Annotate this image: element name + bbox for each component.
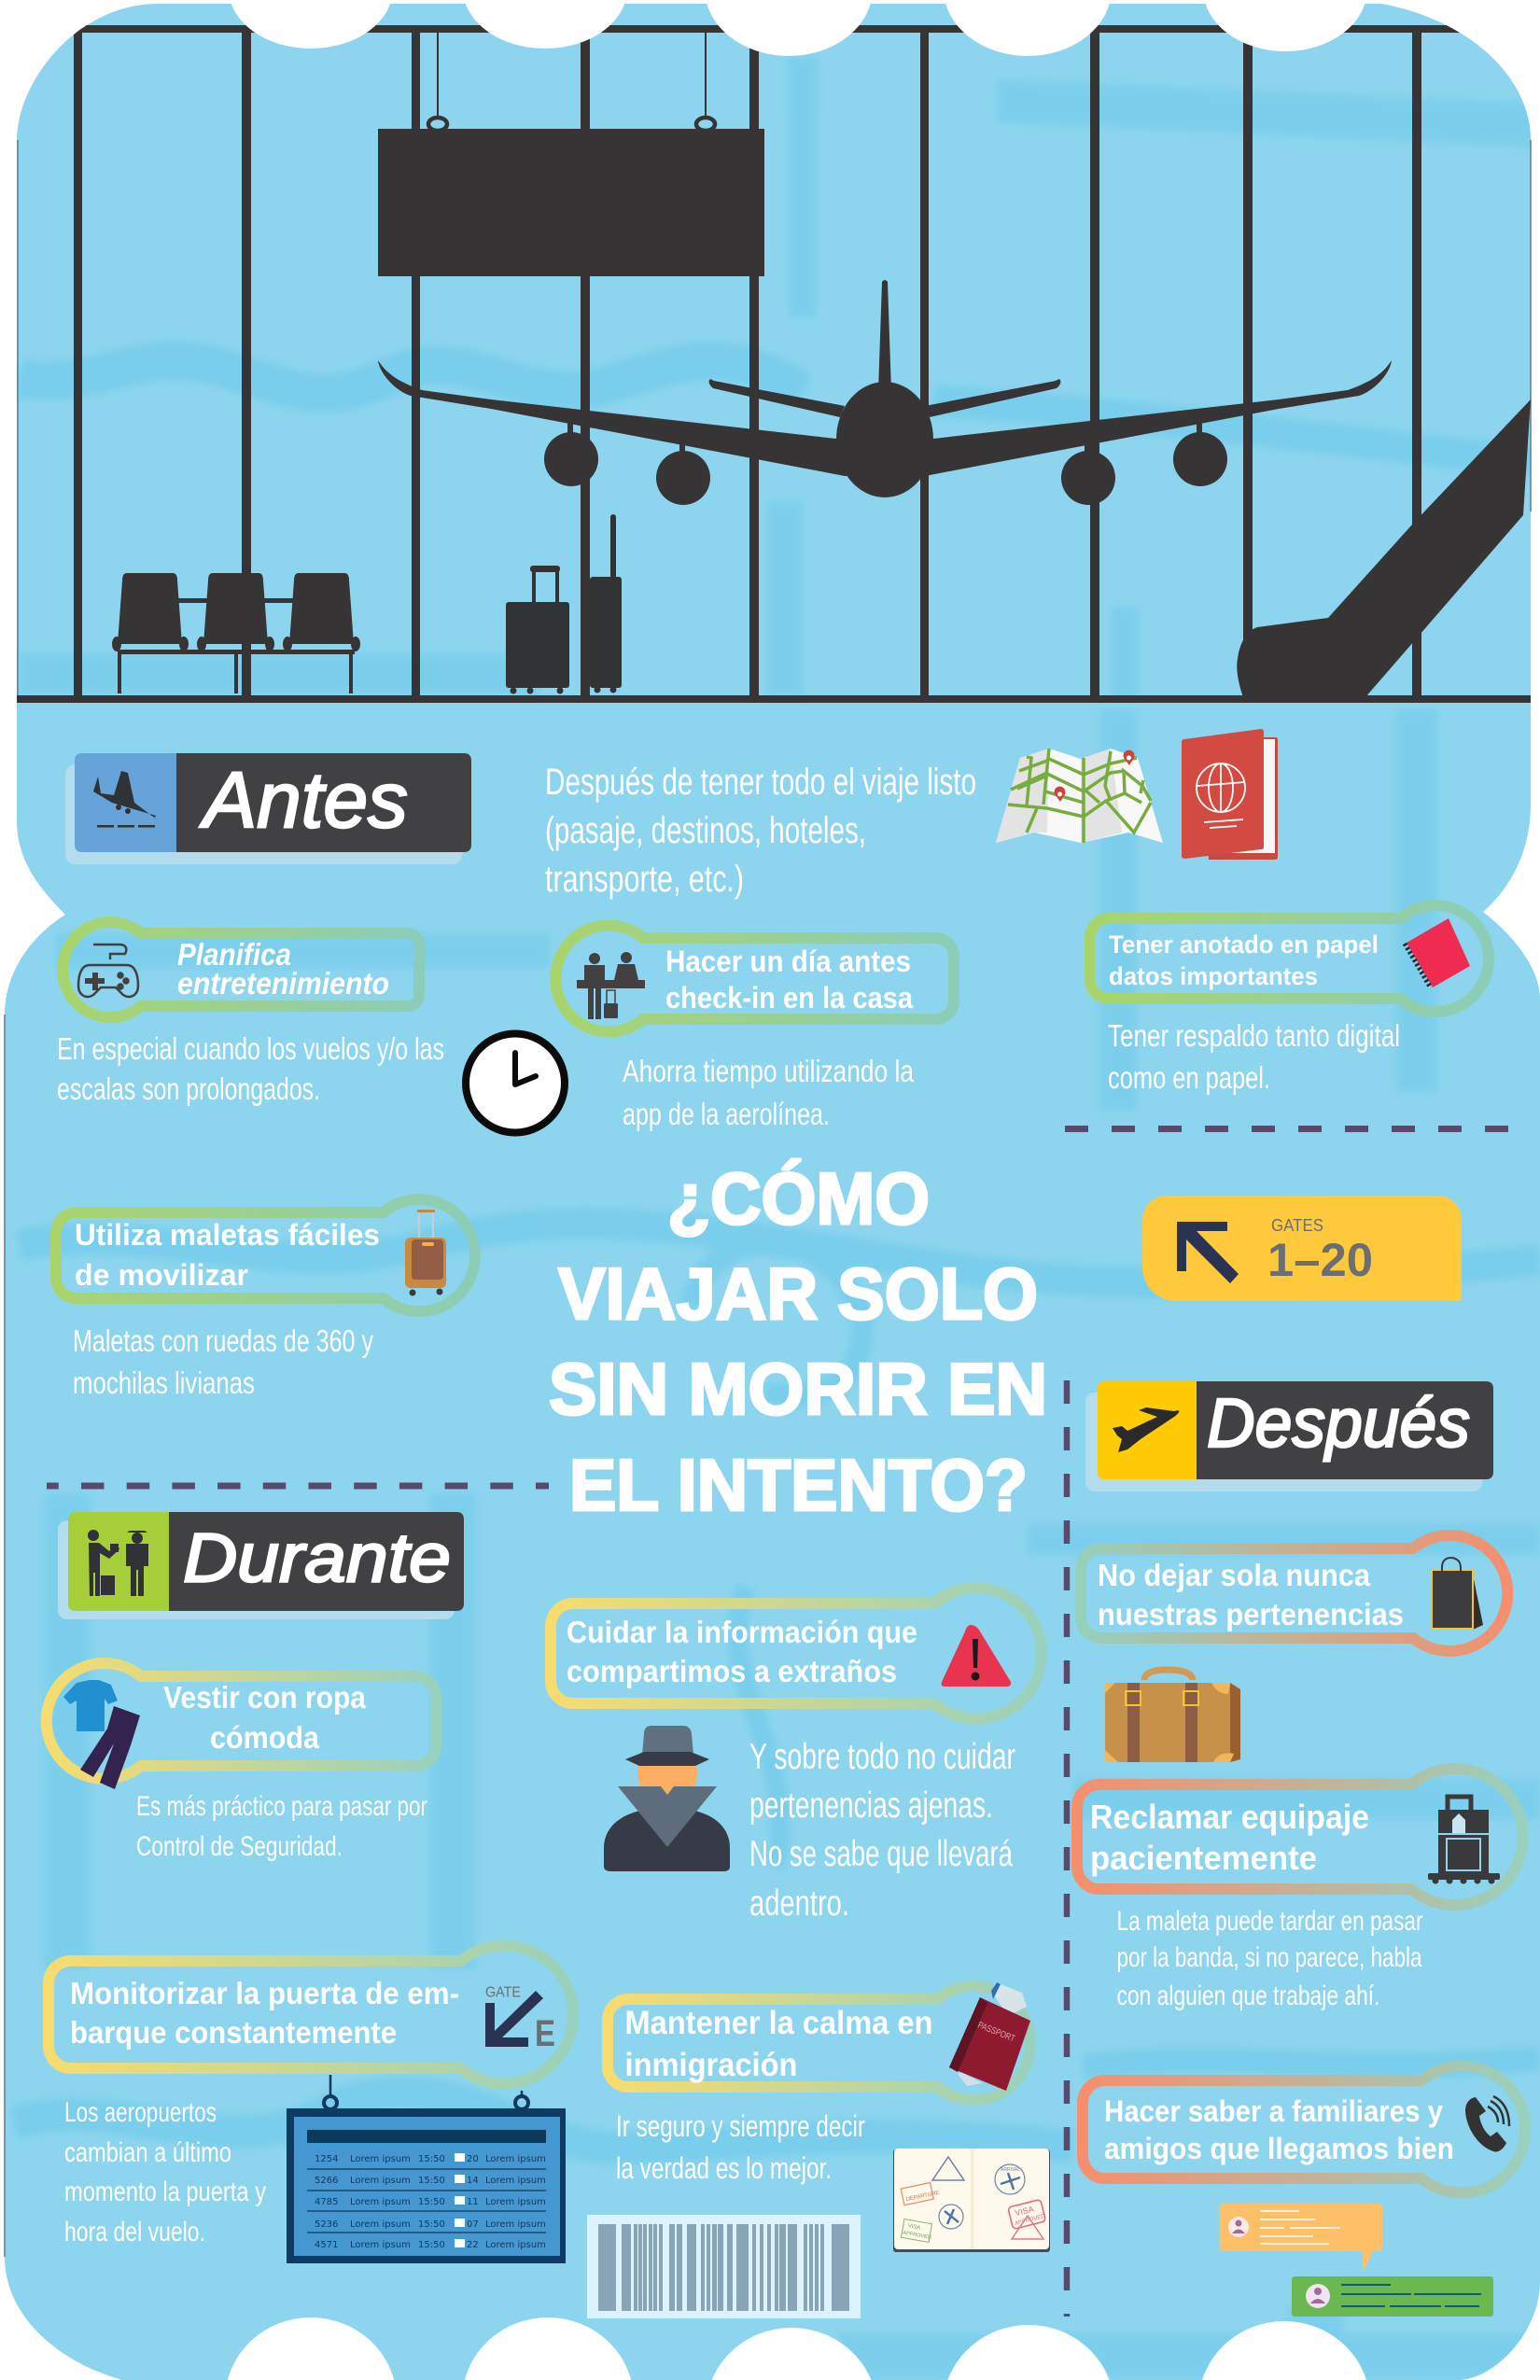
heading: Antes: [199, 756, 408, 844]
dashes: [47, 1482, 549, 1490]
rows: 07: [467, 2219, 479, 2230]
callout title: Mantener la calma en: [625, 2005, 933, 2041]
rows: 1254: [315, 2154, 338, 2164]
callout title: Hacer saber a familiares y: [1104, 2094, 1443, 2128]
callout title: inmigración: [625, 2047, 797, 2083]
text: inmigración detail: [616, 2109, 865, 2185]
badge: Durante: [58, 1512, 464, 1619]
callout title: Tener anotado en papel: [1109, 931, 1379, 959]
callout: Hacer saber a familiares: [1083, 2066, 1525, 2192]
callout title: [665, 945, 913, 1015]
callout: Vestir con ropa cómoda: [47, 1663, 436, 1789]
rows: 15:50: [418, 2240, 445, 2250]
rows: 11: [467, 2197, 479, 2207]
rows: [315, 2153, 546, 2250]
text: extraños detail: adentro.: [749, 1883, 849, 1924]
icon: arrow: [1177, 1222, 1239, 1283]
icon: passport control: [88, 1530, 148, 1596]
title: SIN MORIR EN: [549, 1348, 1047, 1430]
callout title: [1090, 1798, 1369, 1877]
icon: shopping bag: [1432, 1558, 1483, 1630]
text: ropa detail: [136, 1791, 427, 1862]
icon: check-in desk: [577, 952, 645, 1019]
callout title: entretenimiento: [177, 966, 389, 1001]
icon: map: [996, 749, 1163, 843]
rows: Lorem ipsum: [485, 2240, 546, 2250]
rows: Lorem ipsum: [485, 2154, 546, 2164]
icon: clothes: [63, 1680, 140, 1789]
callout title: cómoda: [210, 1720, 320, 1755]
icon: phone: [1465, 2096, 1509, 2151]
intro text: [545, 762, 976, 900]
dashes: [1065, 1126, 1509, 1132]
icon: burgundy passport: [949, 1982, 1030, 2091]
text: equipaje detail: La maleta puede tardar en pasar: [1116, 1906, 1423, 1937]
callout title: nuestras pertenencias: [1098, 1597, 1404, 1631]
icon: stamped passport pages: DEPARTURE: [905, 2191, 940, 2203]
rows: 20: [467, 2154, 479, 2164]
icon: chat bubbles: [1220, 2203, 1493, 2317]
rows: 5266: [315, 2176, 338, 2186]
rows: 15:50: [418, 2219, 445, 2230]
badge: Antes: [65, 753, 471, 864]
callout: Monitorizar la puerta: [49, 1945, 573, 2083]
icon: stamped passport pages: VISA: [1014, 2205, 1035, 2218]
callout title: check-in en la casa: [665, 981, 913, 1015]
icon: orange suitcase: [405, 1210, 446, 1295]
icon: stamped passport pages: ARRIVAL: [1001, 2167, 1020, 2173]
text: puerta detail: cambian a último: [64, 2137, 231, 2168]
orange bubble: [1220, 2203, 1382, 2272]
callout title: [163, 1680, 367, 1755]
text: inmigración detail: Ir seguro y siempre decir: [616, 2109, 865, 2143]
text: Planifica detail: escalas son prolongados.: [57, 1071, 320, 1106]
icon: gate arrow: GATE: [485, 1984, 521, 2001]
icon: stamped passport pages: VISA: [907, 2223, 921, 2232]
rows: Lorem ipsum: [350, 2176, 411, 2186]
icon: spy: [604, 1726, 730, 1871]
badge: Después: [1085, 1381, 1493, 1491]
rows: Lorem ipsum: [485, 2219, 546, 2230]
text: equipaje detail: [1116, 1906, 1423, 2011]
window frame: [17, 25, 1538, 703]
callout title: No dejar sola nunca: [1098, 1558, 1371, 1592]
icon: gate arrow: E: [535, 2013, 555, 2054]
heading: Durante: [183, 1519, 451, 1596]
airport window scene: [17, 25, 1538, 703]
callout: Planifica entretenimiento: [63, 922, 419, 1017]
rows: 22: [467, 2240, 479, 2250]
intro text: transporte, etc.): [545, 859, 744, 900]
rows: Lorem ipsum: [350, 2197, 411, 2207]
callout title: pacientemente: [1090, 1839, 1317, 1877]
icon: stamped passport pages: [893, 2149, 1050, 2252]
icon: notebook: [1405, 918, 1470, 987]
luggage silhouettes: [506, 514, 622, 694]
callout: No dejar sola: [1081, 1535, 1507, 1651]
icon: stamped passport pages: APPROVED: [1015, 2214, 1046, 2227]
callout: Hacer un día antes: [555, 926, 954, 1032]
title: EL INTENTO?: [569, 1444, 1028, 1526]
callout: Cuidar la información: [551, 1589, 1042, 1719]
text: puerta detail: hora del vuelo.: [64, 2217, 205, 2247]
rows: Lorem ipsum: [485, 2197, 546, 2207]
callout title: [1098, 1558, 1404, 1631]
text: maletas detail: mochilas livianas: [73, 1365, 255, 1400]
hanging sign: [378, 33, 764, 276]
icon: brown suitcase: [1105, 1670, 1240, 1762]
callout: Reclamar equipaje: [1077, 1769, 1523, 1905]
waiting seats: [112, 573, 360, 693]
text: maletas detail: Maletas con ruedas de 360 y: [73, 1323, 373, 1358]
text: equipaje detail: con alguien que trabaje ahí.: [1116, 1981, 1379, 2011]
icon: landing plane: [93, 771, 157, 827]
callout title: barque constantemente: [70, 2015, 397, 2050]
callout title: [75, 1218, 380, 1292]
departures board: [287, 2075, 566, 2263]
icon: warning: [941, 1625, 1011, 1687]
text: Planifica detail: [57, 1031, 444, 1106]
text: ropa detail: Control de Seguridad.: [136, 1831, 343, 1862]
text: check-in detail: Ahorra tiempo utilizando la: [623, 1054, 915, 1088]
rows: 4785: [315, 2197, 338, 2207]
callout: Utiliza maletas: [56, 1199, 475, 1311]
text: puerta detail: [64, 2097, 266, 2247]
callout: Mantener la calma: [608, 1982, 1030, 2100]
icon: baggage carousel: [1428, 1797, 1500, 1883]
callout title: [70, 1976, 459, 2050]
icon: takeoff plane: [1113, 1407, 1179, 1452]
callout title: Cuidar la información que: [567, 1615, 917, 1649]
text: equipaje detail: por la banda, si no parece, habla: [1116, 1942, 1422, 1973]
text: maletas detail: [73, 1323, 373, 1400]
number: 1–20: [1267, 1234, 1373, 1286]
hooks: [324, 2075, 528, 2109]
rows: Lorem ipsum: [350, 2240, 411, 2250]
rows: 5236: [315, 2219, 338, 2230]
text: check-in detail: [623, 1054, 915, 1131]
airplane silhouette: [378, 280, 1392, 505]
callout title: [1109, 931, 1379, 990]
callout title: [625, 2005, 933, 2083]
callout title: Vestir con ropa: [163, 1680, 367, 1715]
callout title: [1104, 2094, 1454, 2165]
callout title: [177, 937, 389, 1001]
dashes: [1064, 1380, 1070, 2317]
rows: 4571: [315, 2240, 338, 2250]
text: extraños detail: [749, 1737, 1015, 1924]
rows: 15:50: [418, 2154, 445, 2164]
icon: gate arrow: [485, 1984, 555, 2054]
text: Planifica detail: En especial cuando los vuelos y/o las: [57, 1031, 444, 1066]
bottom scallops: [225, 2317, 1370, 2380]
callout: Tener anotado en papel: [1090, 905, 1489, 1012]
rows: Lorem ipsum: [350, 2219, 411, 2230]
icon: burgundy passport: PASSPORT: [976, 2021, 1016, 2045]
title: [549, 1157, 1047, 1526]
callout title: [567, 1615, 917, 1688]
text: respaldo detail: Tener respaldo tanto digital: [1108, 1018, 1400, 1053]
text: respaldo detail: como en papel.: [1108, 1060, 1270, 1095]
sign: gates 1-20: [1142, 1196, 1462, 1301]
icon: gamepad: [78, 945, 138, 997]
text: check-in detail: app de la aerolínea.: [623, 1097, 830, 1131]
callout title: de movilizar: [75, 1258, 248, 1292]
callout title: Monitorizar la puerta de em-: [70, 1976, 459, 2010]
text: extraños detail: Y sobre todo no cuidar: [749, 1737, 1015, 1777]
barcode: [587, 2215, 861, 2318]
callout title: Utiliza maletas fáciles: [75, 1218, 380, 1252]
icon: stamped passport pages: APPROVED: [903, 2231, 931, 2241]
rows: 15:50: [418, 2197, 445, 2207]
jet bridge: [1237, 399, 1531, 697]
top scallops: [229, 0, 1367, 56]
text: ropa detail: Es más práctico para pasar por: [136, 1791, 427, 1822]
text: puerta detail: Los aeropuertos: [64, 2097, 217, 2128]
text: puerta detail: momento la puerta y: [64, 2177, 266, 2207]
text: extraños detail: pertenencias ajenas.: [749, 1785, 993, 1826]
text: extraños detail: No se sabe que llevará: [749, 1834, 1013, 1874]
intro text: Después de tener todo el viaje listo: [545, 762, 976, 803]
rows: 15:50: [418, 2176, 445, 2186]
text: respaldo detail: [1108, 1018, 1400, 1095]
title: VIAJAR SOLO: [558, 1253, 1038, 1335]
icon: red passport: [1182, 729, 1278, 860]
intro text: (pasaje, destinos, hoteles,: [545, 810, 866, 851]
green bubble: [1292, 2276, 1493, 2317]
title: ¿CÓMO: [667, 1157, 930, 1239]
label: GATES: [1271, 1216, 1323, 1235]
icon: clock: [466, 1034, 565, 1133]
heading: Después: [1207, 1384, 1470, 1462]
rows: Lorem ipsum: [485, 2176, 546, 2186]
callout title: amigos que llegamos bien: [1104, 2132, 1454, 2165]
rows: 14: [467, 2176, 479, 2186]
callout title: Reclamar equipaje: [1090, 1798, 1369, 1836]
rows: Lorem ipsum: [350, 2154, 411, 2164]
callout title: compartimos a extraños: [567, 1654, 897, 1688]
callout title: datos importantes: [1109, 962, 1318, 990]
callout title: Planifica: [177, 937, 291, 972]
text: inmigración detail: la verdad es lo mejor.: [616, 2151, 832, 2185]
callout title: Hacer un día antes: [665, 945, 911, 978]
